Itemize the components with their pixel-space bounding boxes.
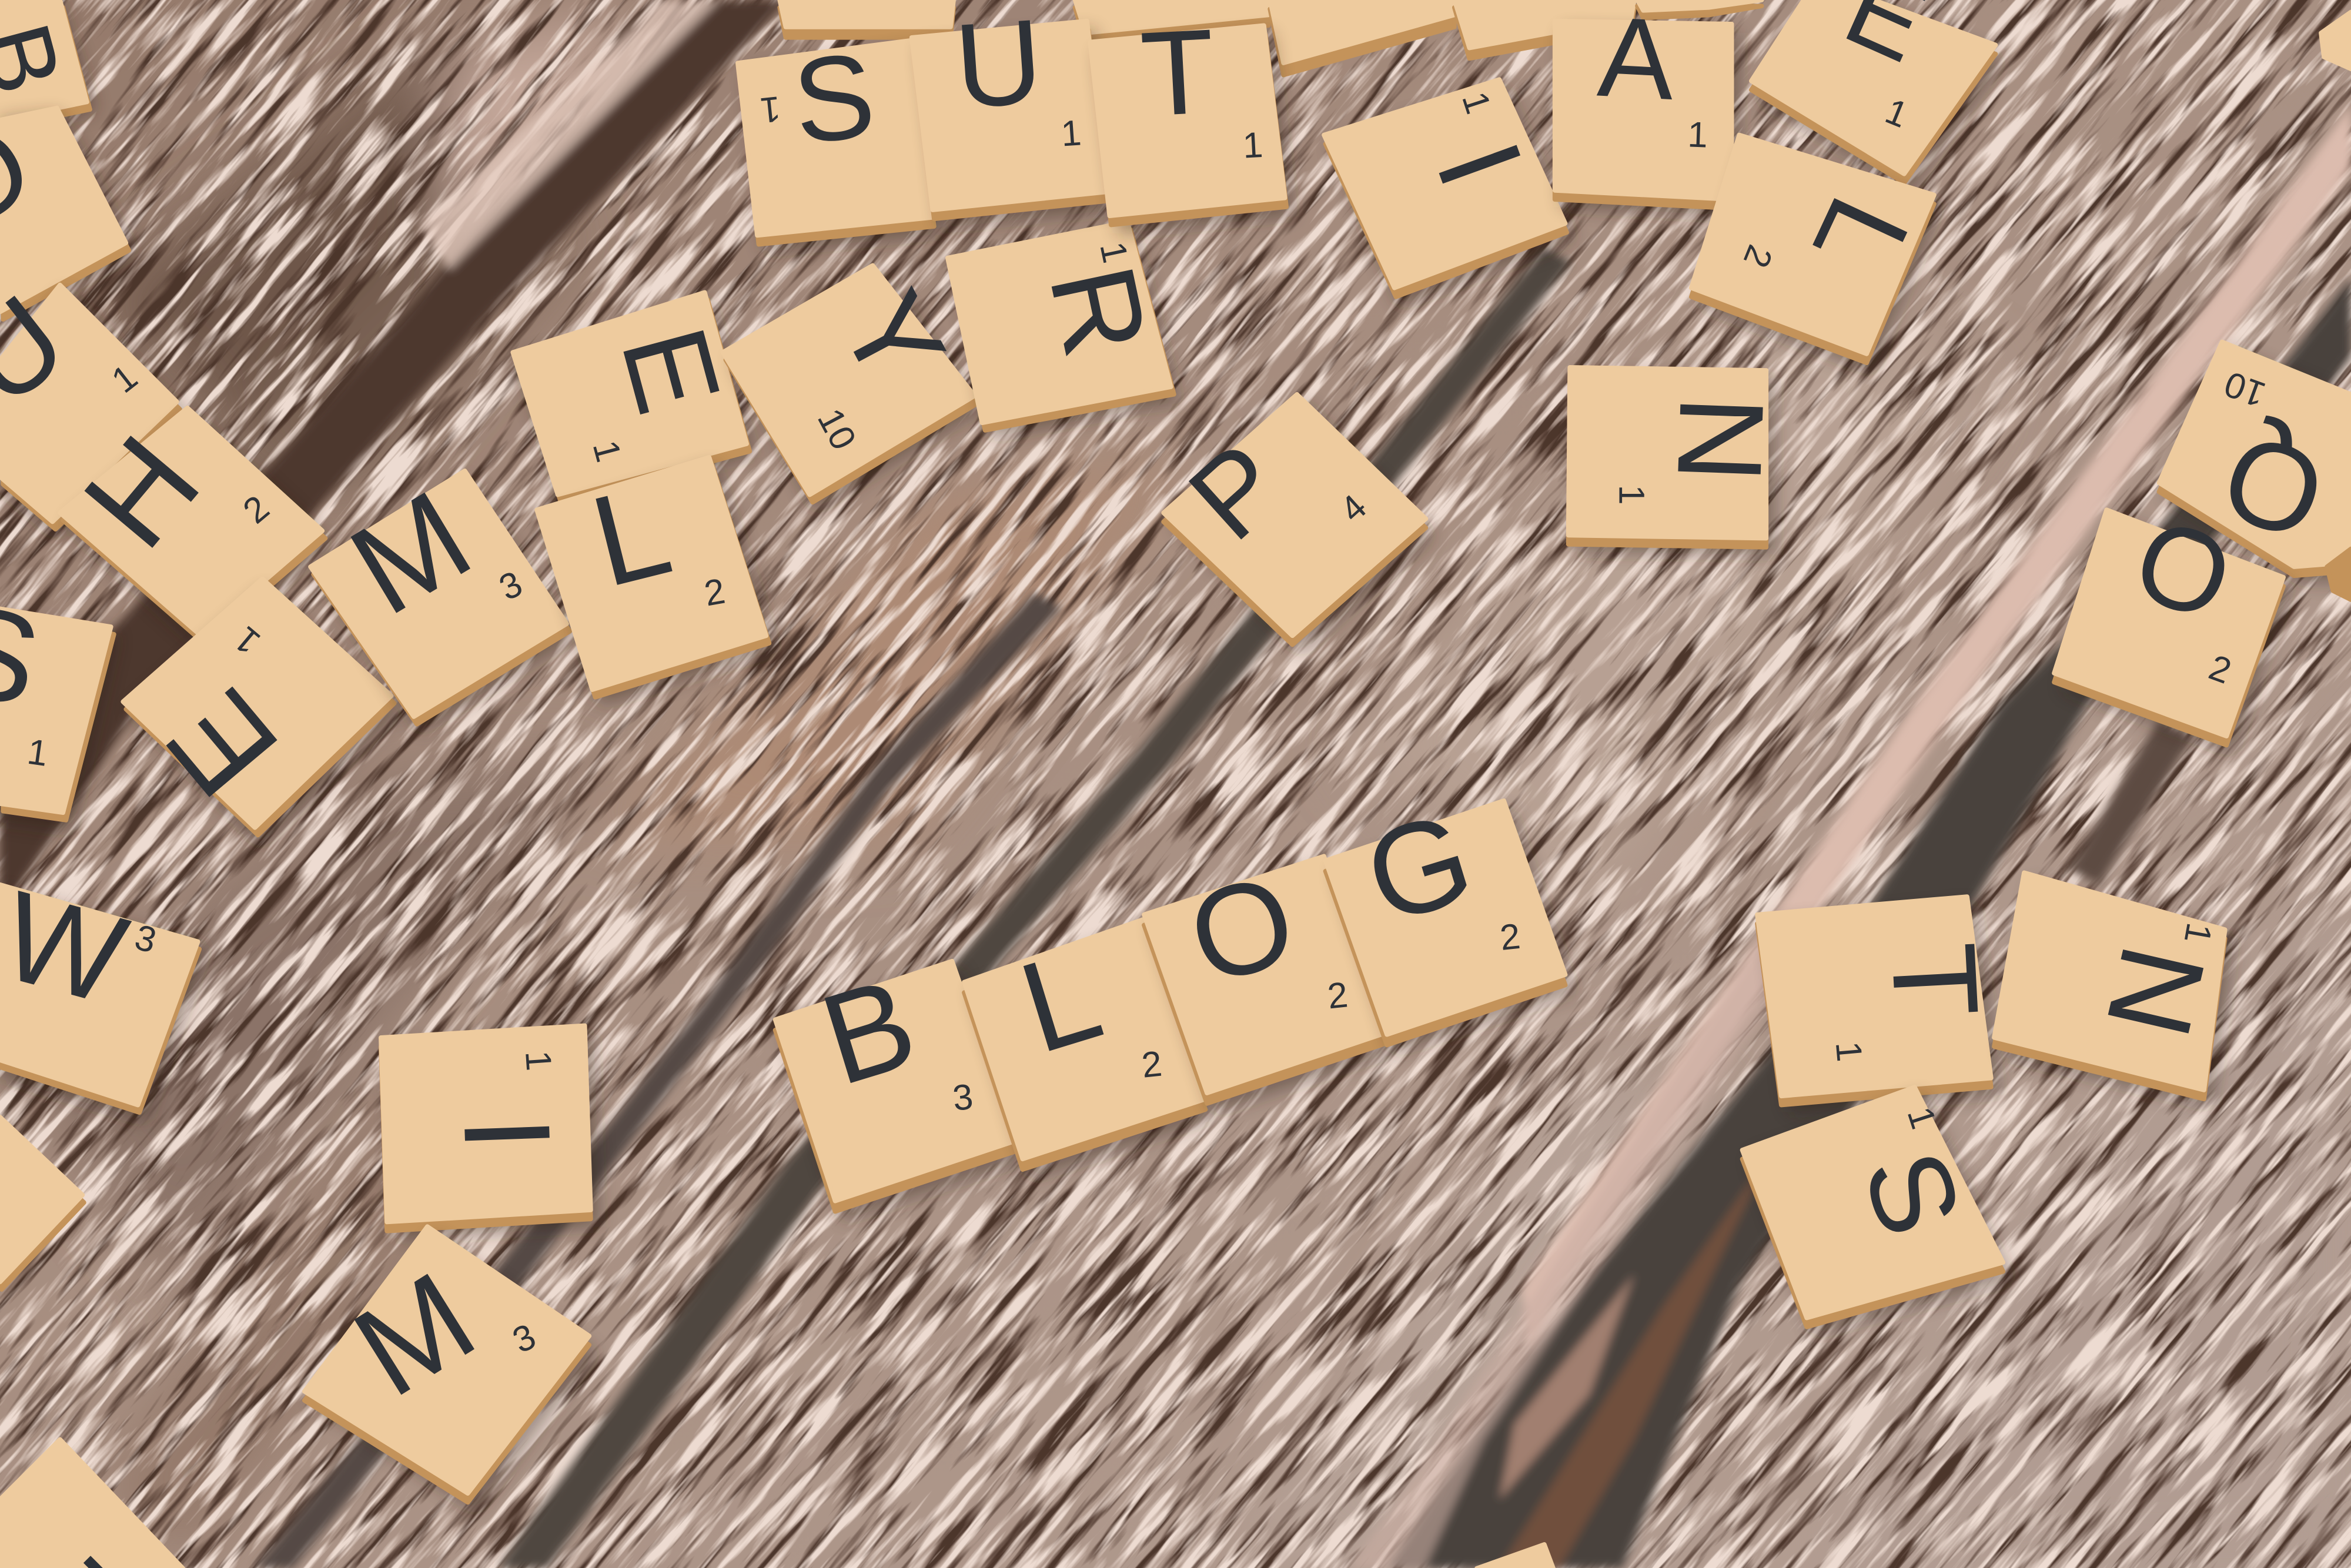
tile: T top row xyxy=(1090,4,1292,234)
tile: H xyxy=(56,408,330,654)
tile: Q right edge xyxy=(2159,342,2351,582)
tile: U top row xyxy=(912,0,1115,228)
tile: partial top row xyxy=(780,0,1762,75)
tile: partial bottom corner xyxy=(0,1439,189,1568)
tile: T top row: 1 xyxy=(1242,125,1264,166)
tile: L: L xyxy=(579,457,683,614)
tile: B: B xyxy=(807,950,931,1112)
tile: N middle: N xyxy=(1652,394,1789,485)
tile: U top row: 1 xyxy=(1060,112,1082,154)
tile: Y xyxy=(723,265,984,510)
tile: S top row xyxy=(738,28,942,252)
tile: L xyxy=(964,919,1212,1179)
tile: P: P xyxy=(1166,419,1307,564)
tile: T top row: T xyxy=(1138,4,1218,142)
tile: I bottom left: 1 xyxy=(518,1049,559,1072)
tile: N middle xyxy=(1569,367,1789,555)
tile: E: 1 xyxy=(586,436,629,466)
tile: partial O left xyxy=(0,96,135,324)
tile: N bottom right xyxy=(1994,872,2234,1106)
tile: S bottom right: S xyxy=(1838,1136,1987,1251)
tile: N bottom right: 1 xyxy=(2177,920,2220,947)
tile: R xyxy=(948,222,1179,438)
tile: O right: 2 xyxy=(2204,647,2236,691)
tile: S left: 1 xyxy=(25,731,51,774)
tile: I bottom left xyxy=(381,1025,600,1239)
tile: P xyxy=(1163,394,1433,654)
word: BLOG xyxy=(775,784,1574,1221)
tile: partial bottom left xyxy=(0,1117,84,1289)
tile: L rotated: 2 xyxy=(1736,240,1781,273)
tile: E top right xyxy=(1751,0,2003,192)
tile: O: O xyxy=(1173,845,1311,1012)
tile: H: 2 xyxy=(236,487,276,531)
tile: A xyxy=(1555,0,1739,216)
tile: R: 1 xyxy=(1092,238,1136,266)
tile: L: 2 xyxy=(1140,1044,1164,1085)
tile: N bottom right: N xyxy=(2081,934,2230,1049)
tile: G: 2 xyxy=(1498,916,1522,958)
tile: M bottom left: M xyxy=(330,1245,498,1424)
tile: O xyxy=(1144,845,1392,1112)
tile: L rotated xyxy=(1691,135,1940,372)
tile: Q right edge: 10 xyxy=(2219,364,2270,415)
tile: M bottom left xyxy=(305,1226,597,1512)
tile: I bottom left: I xyxy=(438,1114,576,1153)
tile: partial right edge xyxy=(2321,12,2351,600)
tile: M top: 3 xyxy=(493,563,528,608)
tile: Y: 10 xyxy=(810,402,864,456)
tile: N middle: 1 xyxy=(1611,485,1651,505)
tile: partial top-left xyxy=(0,0,96,135)
tile: T bottom right: 1 xyxy=(1828,1040,1870,1063)
tile: H: H xyxy=(56,410,226,574)
tile: I rotated xyxy=(1324,79,1574,306)
tile: E: E xyxy=(596,314,746,426)
tile: B xyxy=(775,950,1022,1221)
tile: E xyxy=(513,292,755,507)
tile: L: L xyxy=(1005,922,1116,1081)
tile: G: G xyxy=(1350,784,1488,951)
tile: partial bottom center xyxy=(1477,1544,1553,1568)
tile: S bottom right xyxy=(1743,1087,2012,1335)
tile: W xyxy=(0,865,207,1122)
tile: L xyxy=(537,457,777,705)
tile: S top row: S xyxy=(787,28,881,169)
tile: rotated E xyxy=(123,579,399,845)
tile: G xyxy=(1326,784,1574,1052)
tile: rotated E: 1 xyxy=(226,619,267,663)
tile: M top: M xyxy=(327,463,494,642)
tile: I rotated: 1 xyxy=(1454,87,1499,118)
tile: I rotated: I xyxy=(1411,126,1549,203)
tile: O: 2 xyxy=(1326,974,1350,1017)
tile: S top row: 1 xyxy=(758,89,782,131)
tile: R: R xyxy=(1024,255,1173,367)
tile: B: 3 xyxy=(951,1076,975,1118)
tile: S left xyxy=(0,576,117,831)
tile: O right: O xyxy=(2118,493,2248,647)
tile: rotated E: E xyxy=(139,664,305,823)
tile: A: 1 xyxy=(1687,114,1708,155)
tile: Q right edge: Q xyxy=(2205,406,2342,567)
tile: T bottom right: T xyxy=(1866,940,2004,1020)
tile: E top right: 1 xyxy=(1880,91,1914,135)
tile: M bottom left: 3 xyxy=(507,1316,541,1360)
tile: Y: Y xyxy=(814,271,971,404)
tile: O right xyxy=(2054,493,2291,753)
tile: U left: 1 xyxy=(104,357,145,400)
tile: T bottom right xyxy=(1757,897,2004,1112)
tile: U left xyxy=(0,269,183,537)
tile: S bottom right: 1 xyxy=(1900,1102,1944,1134)
tile: P: 4 xyxy=(1332,487,1374,530)
tile: L: 2 xyxy=(701,571,728,614)
tile: W: 3 xyxy=(131,917,160,961)
tile: M top xyxy=(310,463,573,732)
tile: L rotated: L xyxy=(1788,179,1934,293)
